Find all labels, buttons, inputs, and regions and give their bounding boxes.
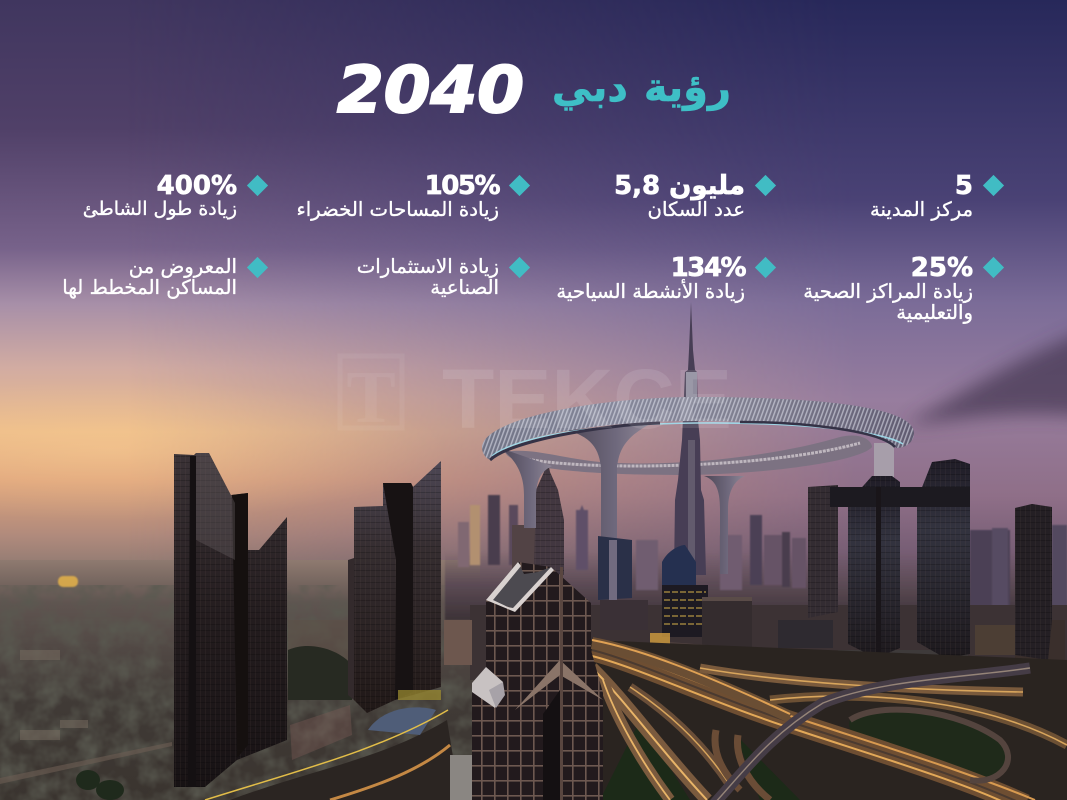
stat text: زيادة طول الشاطئ — [83, 198, 237, 220]
stat text: 5 — [955, 171, 973, 201]
ring lower deck — [505, 435, 872, 475]
dark cloud — [905, 325, 1067, 425]
bullet: beach length — [83, 171, 268, 220]
left city ground — [0, 560, 480, 800]
stat text — [870, 171, 973, 221]
stat text: الصناعية — [430, 276, 499, 299]
stat text — [62, 255, 237, 299]
highway interchange — [590, 640, 1067, 800]
icon: diamond — [509, 257, 530, 278]
distant skyline — [445, 495, 1067, 625]
sky — [0, 0, 1067, 605]
icon: diamond — [755, 175, 776, 196]
stat text: زيادة الأنشطة السياحية — [556, 280, 745, 302]
watermark: TEKCE: T — [346, 357, 396, 439]
watermark: TEKCE: TEKCE — [442, 352, 732, 446]
stat text: مليون 5,8 — [614, 171, 745, 201]
stat text: زيادة المساحات الخضراء — [296, 198, 499, 220]
bullet: health and education — [803, 253, 1004, 324]
main ring column — [566, 424, 650, 593]
icon: diamond — [247, 175, 268, 196]
stat text — [614, 171, 745, 220]
mid ground right — [470, 585, 1067, 680]
bullet: industrial investment — [357, 255, 530, 299]
stat text: 105% — [425, 171, 499, 201]
stat text — [803, 253, 973, 324]
title: Arabic heading: رؤية دبي — [552, 65, 731, 111]
foreground tower left — [174, 453, 287, 787]
bullet: population — [614, 171, 776, 220]
podium and road — [205, 620, 472, 800]
stat text — [296, 171, 500, 222]
right twin towers with sky bridge — [808, 459, 970, 658]
stat text: المساكن المخطط لها — [62, 276, 237, 299]
stat text — [556, 253, 746, 304]
stat text — [83, 171, 237, 220]
far right tower — [1015, 504, 1052, 660]
stat text: 400% — [157, 171, 237, 201]
far-left downtown towers — [512, 458, 564, 575]
foreground tower front — [472, 562, 603, 800]
bullet: tourism — [556, 253, 776, 304]
stat text — [357, 255, 499, 299]
bullet: housing supply — [62, 255, 268, 299]
icon: diamond — [983, 175, 1004, 196]
ring upper band — [482, 397, 914, 460]
stat text: مركز المدينة — [870, 198, 973, 220]
icon: diamond — [247, 257, 268, 278]
stat text: المعروض من — [129, 255, 237, 278]
ring support columns — [500, 443, 894, 574]
foreground tower middle — [348, 461, 441, 713]
stat text: والتعليمية — [896, 301, 973, 324]
icon: diamond — [983, 257, 1004, 278]
title: year: 2040 — [337, 54, 524, 128]
bullet: city centres — [870, 171, 1004, 221]
stat text: زيادة المراكز الصحية — [803, 280, 973, 302]
stat text: 25% — [911, 253, 973, 283]
stat text: زيادة الاستثمارات — [357, 255, 499, 278]
icon: diamond — [755, 257, 776, 278]
glass towers — [598, 536, 696, 600]
title — [336, 54, 731, 128]
stat text: عدد السكان — [648, 198, 745, 220]
Burj Khalifa — [674, 302, 706, 575]
bullet: green spaces — [296, 171, 530, 222]
icon: diamond — [509, 175, 530, 196]
stat text: 134% — [671, 253, 745, 283]
